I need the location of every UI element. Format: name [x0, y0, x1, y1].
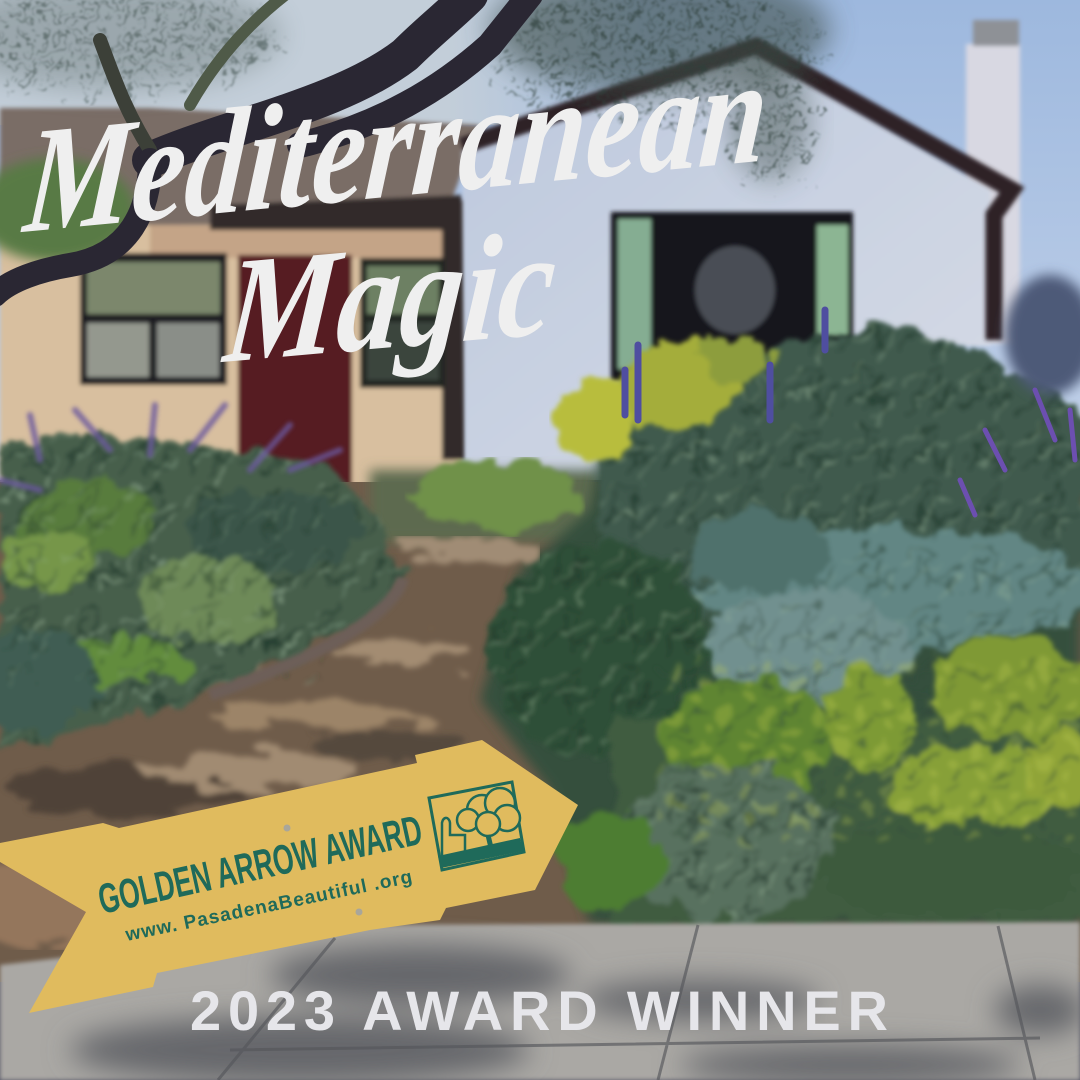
- script title: [18, 25, 774, 395]
- porch ceiling: [150, 225, 445, 258]
- golden arrow sign: [0, 740, 578, 1013]
- canopy foliage: [0, 0, 830, 262]
- sign shape: [0, 740, 578, 1013]
- sign url: www. PasadenaBeautiful .org: [123, 867, 414, 946]
- left garden bed: [0, 436, 402, 750]
- beige wall: [0, 225, 462, 490]
- porch beam: [210, 195, 462, 230]
- dark foliage mass: [600, 331, 1080, 620]
- sidewalk shadows: [70, 945, 1080, 1080]
- shrubs: right garden: [488, 275, 1080, 925]
- sign heading: GOLDEN ARROW AWARD: [94, 806, 426, 923]
- blue-green mid shrubs: [690, 510, 1080, 710]
- roof tiles: [0, 108, 480, 232]
- title line 1: Mediterranean: [18, 25, 774, 265]
- branches: [0, 0, 530, 295]
- curved garden edging: [210, 578, 403, 695]
- left window: [80, 253, 227, 385]
- sky background: [0, 0, 1080, 480]
- red door: [238, 255, 352, 487]
- award caption: 2023 AWARD WINNER: [190, 979, 888, 1042]
- pale sky behind tree: [0, 0, 640, 125]
- house: left wing: [0, 108, 480, 490]
- chimney: [966, 20, 1020, 344]
- garden and path base: [0, 430, 1080, 982]
- step area: [370, 470, 600, 542]
- sidewalk: [0, 922, 1080, 1080]
- sign logo: tree and mission: [429, 782, 524, 870]
- purple flower spikes: [625, 310, 1075, 515]
- porch post: [442, 200, 466, 460]
- centre dark-green shrub: [488, 542, 712, 758]
- right porch window: [360, 258, 445, 388]
- lime foreground: [555, 640, 1080, 925]
- distant purple bush: [1005, 275, 1080, 395]
- white gable wall: [462, 50, 990, 470]
- yellow euphorbia: [560, 335, 773, 462]
- small shrub by steps: [413, 461, 577, 533]
- lavender left: [0, 405, 340, 490]
- title line 2: Magic: [217, 198, 563, 395]
- roof edge: [462, 46, 1012, 340]
- path light and shadow patches: [0, 536, 540, 950]
- right garden base: [480, 430, 1080, 925]
- sign screws: [284, 824, 362, 916]
- tree branches and canopy: [0, 0, 830, 295]
- large front window: [611, 212, 853, 382]
- sidewalk joints: [218, 925, 1040, 1080]
